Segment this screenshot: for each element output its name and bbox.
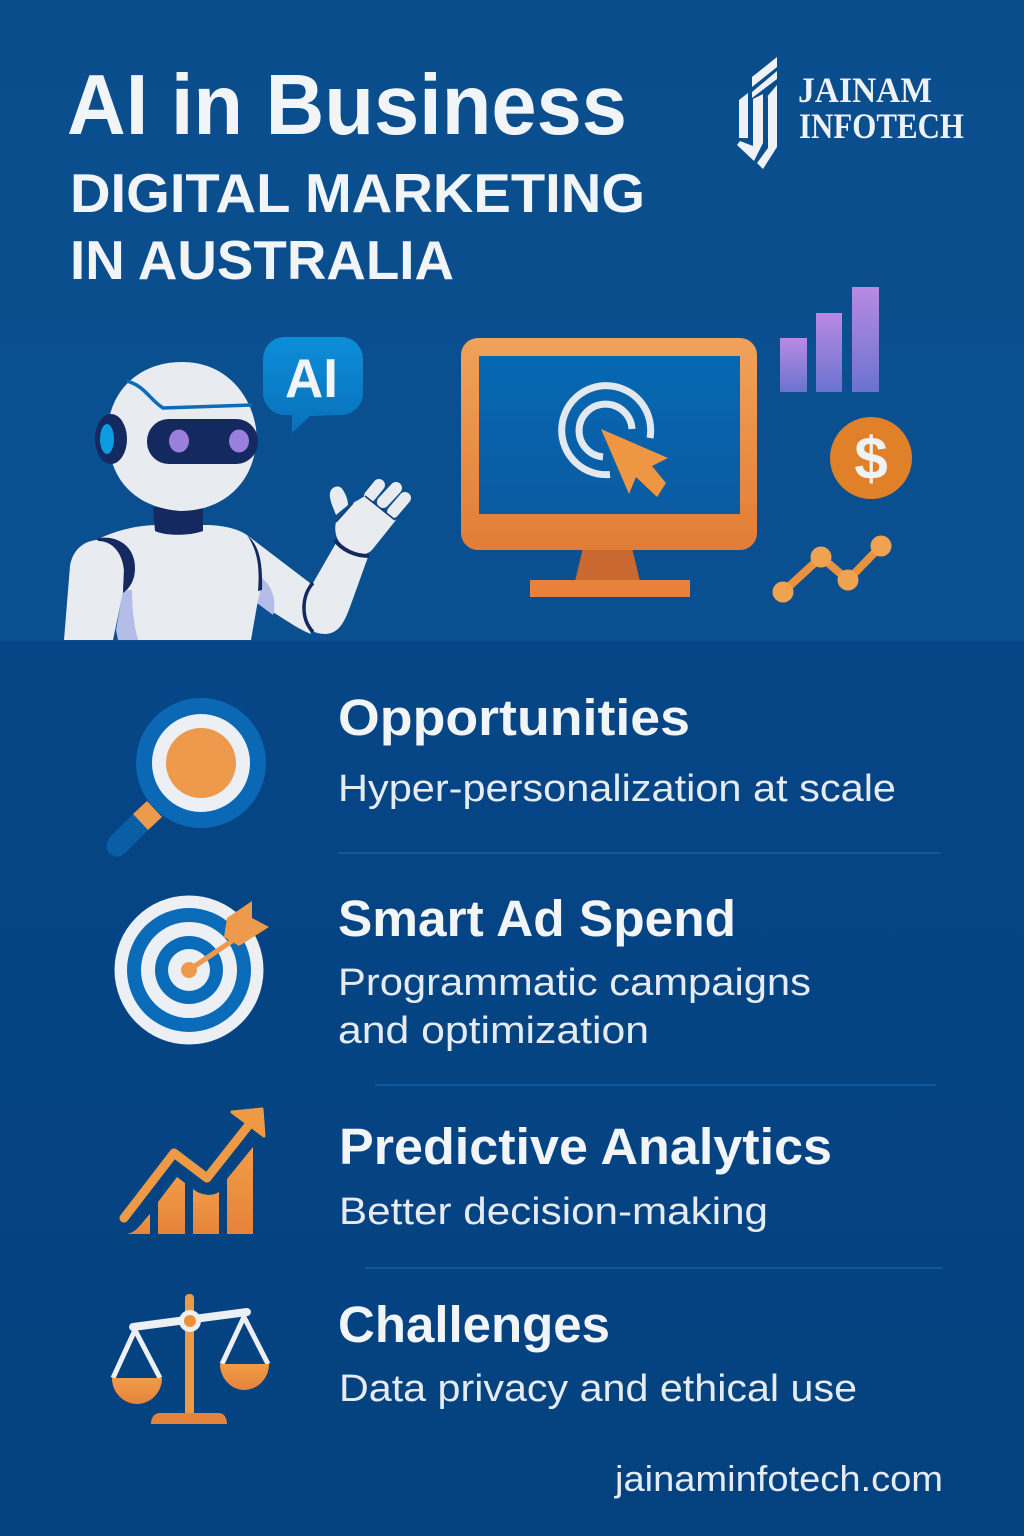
ear xyxy=(95,414,127,464)
monitor xyxy=(461,338,757,597)
monitor base xyxy=(530,580,690,597)
background: top section xyxy=(0,0,1024,641)
background: bottom section xyxy=(0,641,1024,1536)
palm edges xyxy=(336,496,395,522)
speech bubble xyxy=(263,337,363,433)
palm xyxy=(335,496,396,554)
website: jainaminfotech.com xyxy=(614,1458,943,1499)
monitor screen xyxy=(479,356,740,514)
row: predictive analytics xyxy=(339,1118,832,1233)
heading: Challenges xyxy=(338,1296,610,1353)
logo wordmark: INFOTECH xyxy=(799,106,964,146)
thumb xyxy=(330,486,348,515)
robot hand xyxy=(330,485,405,556)
eye right xyxy=(229,430,249,452)
robot right upper arm xyxy=(247,535,311,634)
icon: balance scale xyxy=(112,1294,269,1424)
bubble label: AI xyxy=(285,347,338,409)
heading: Predictive Analytics xyxy=(339,1118,832,1175)
subtitle line 2: IN AUSTRALIA xyxy=(70,229,454,291)
bar chart icon xyxy=(780,287,879,392)
robot arm lavender joint xyxy=(257,578,274,615)
icon: target with dart xyxy=(114,896,269,1044)
subtitle line 1: DIGITAL MARKETING xyxy=(70,162,645,224)
click rings xyxy=(562,386,651,475)
description xyxy=(338,962,811,1052)
robot illustration xyxy=(64,362,405,640)
logo xyxy=(737,57,964,169)
ear light xyxy=(100,424,114,454)
fingers xyxy=(370,485,405,512)
description: Data privacy and ethical use xyxy=(339,1368,857,1410)
cursor arrow xyxy=(601,429,668,497)
description: and optimization xyxy=(338,1010,649,1052)
robot head xyxy=(108,362,256,511)
heading: Opportunities xyxy=(338,689,690,746)
wrist band xyxy=(335,540,369,556)
robot left arm xyxy=(64,540,124,640)
robot neck xyxy=(153,507,203,535)
icon: magnifier xyxy=(107,698,266,857)
description: Better decision-making xyxy=(339,1191,768,1233)
row: challenges xyxy=(338,1296,857,1410)
monitor frame xyxy=(461,338,757,550)
robot lavender side xyxy=(116,590,138,640)
dollar sign: $ xyxy=(854,425,888,492)
line trend icon xyxy=(772,536,892,602)
title block xyxy=(67,58,645,291)
robot right shoulder band xyxy=(247,535,262,591)
row: opportunities xyxy=(338,689,896,810)
description: Hyper-personalization at scale xyxy=(338,768,896,810)
monitor stand xyxy=(575,548,640,581)
head stripe xyxy=(127,381,252,408)
robot forearm xyxy=(305,543,368,634)
elbow band xyxy=(304,583,313,632)
dollar coin xyxy=(830,417,912,499)
robot torso xyxy=(100,525,260,640)
description: Programmatic campaigns xyxy=(338,962,811,1004)
row: smart ad spend xyxy=(338,890,811,1052)
robot shoulder band xyxy=(98,538,135,593)
logo mark xyxy=(737,57,777,169)
visor xyxy=(147,419,258,464)
logo wordmark: JAINAM xyxy=(798,70,932,110)
logo wordmark xyxy=(798,70,964,146)
coin xyxy=(830,417,912,499)
bubble shape xyxy=(263,337,363,433)
eye left xyxy=(169,430,189,452)
title: AI in Business xyxy=(67,58,627,153)
icon: growth chart xyxy=(124,1109,264,1234)
heading: Smart Ad Spend xyxy=(338,890,736,947)
